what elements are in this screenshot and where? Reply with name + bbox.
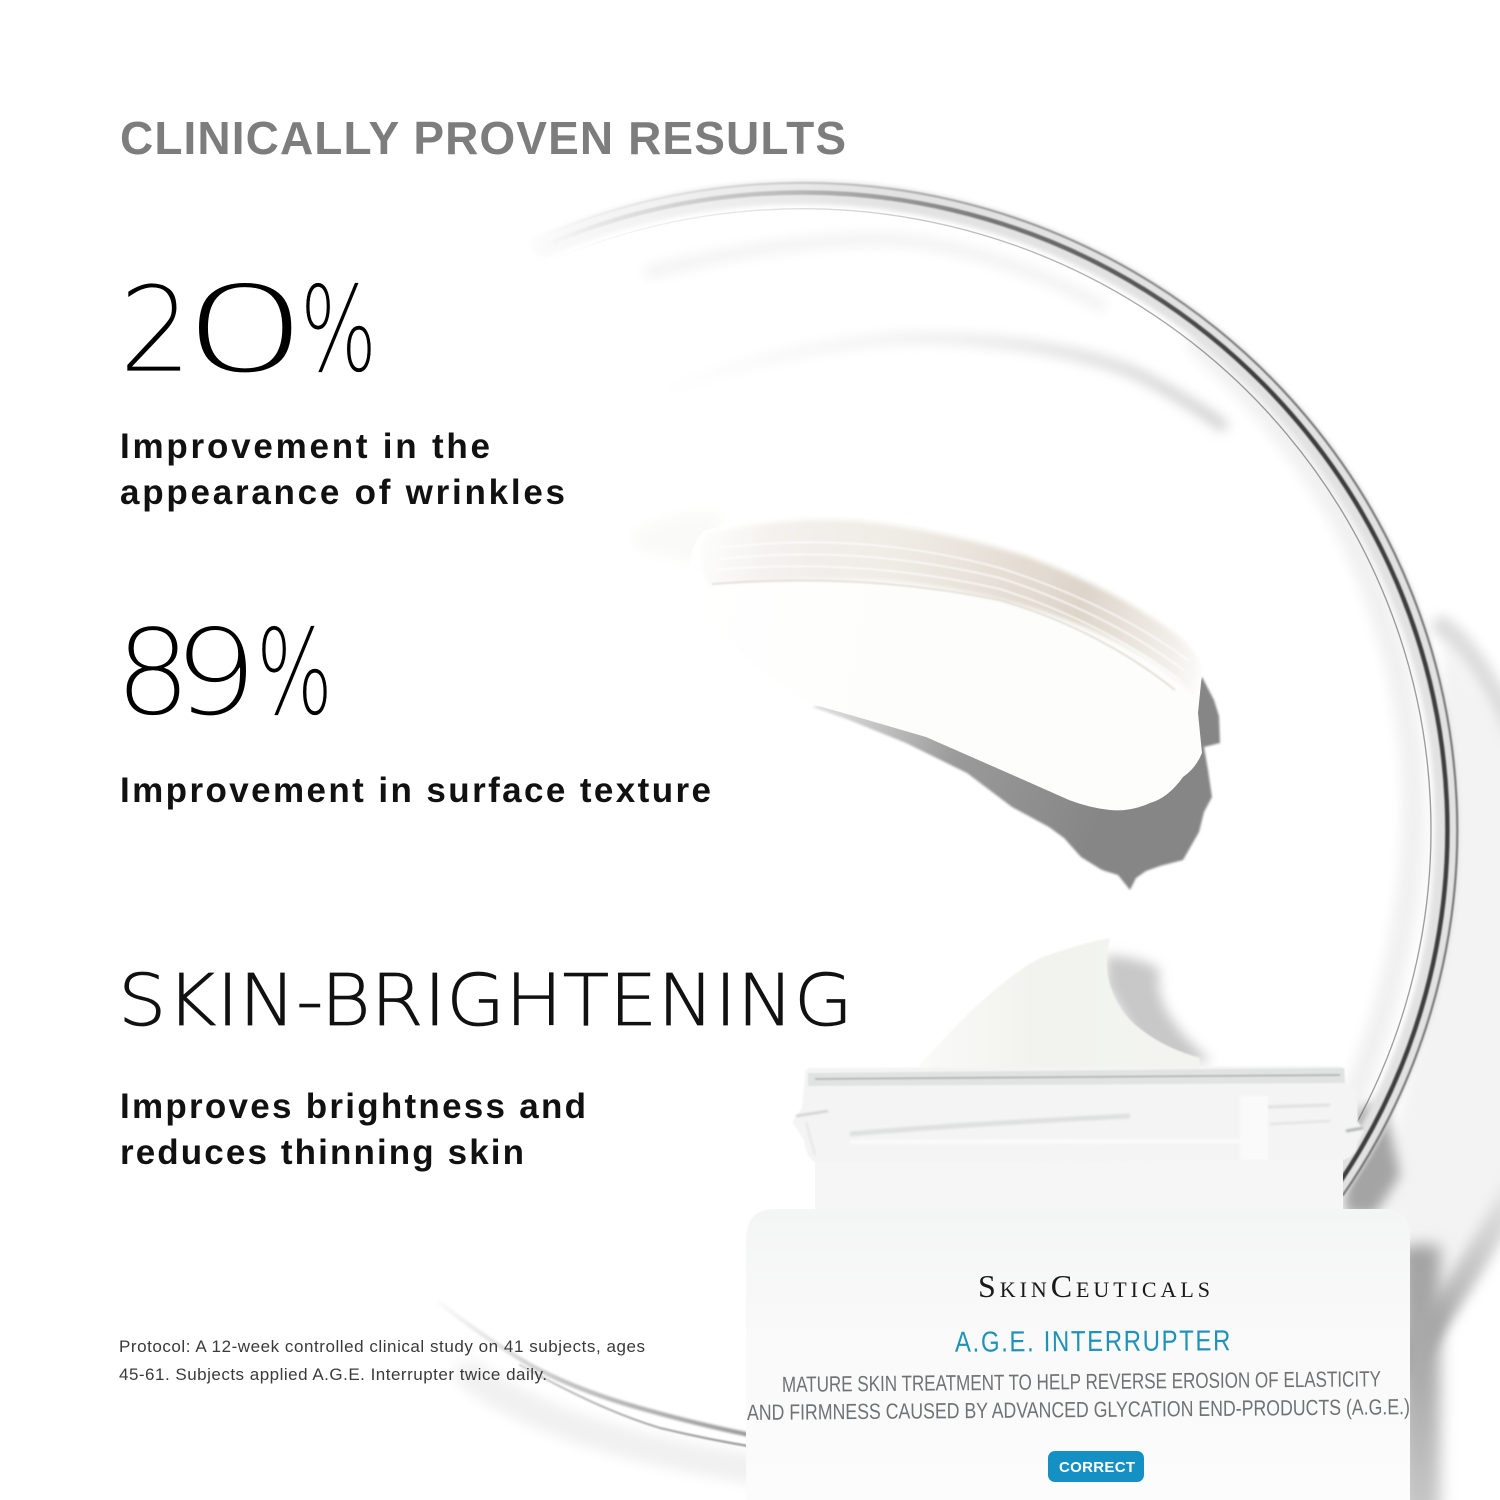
- inner soft swirl: [650, 338, 1222, 425]
- stat: skin-brightening: [118, 959, 853, 1172]
- rim highlight line: [815, 1075, 1340, 1079]
- wrinkles caption: Improvement in the: [120, 427, 490, 466]
- dish outer shadow upper: [1442, 626, 1500, 735]
- collar highlight: [1240, 1096, 1268, 1160]
- glass dish ring and swirl: [440, 183, 1500, 1500]
- protocol footnote: [119, 1337, 645, 1384]
- dish rim main dark line: [544, 193, 1447, 1189]
- cream shadow: [812, 677, 1220, 890]
- brightening caption: reduces thinning skin: [120, 1133, 524, 1172]
- cream swatch: [630, 512, 1220, 890]
- protocol footnote: 45-61. Subjects applied A.G.E. Interrupter twice daily.: [119, 1365, 547, 1384]
- number 89%: 9: [173, 605, 258, 743]
- jar collar details: [796, 1105, 1363, 1155]
- faint upper swirl: [650, 239, 1100, 305]
- brightening caption: Improves brightness and: [120, 1087, 586, 1126]
- title: CLINICALLY PROVEN RESULTS: [120, 112, 846, 164]
- texture caption: Improvement in surface texture: [120, 771, 711, 810]
- jar neck: [815, 1150, 1343, 1245]
- product name: A.G.E. INTERRUPTER: [955, 1325, 1232, 1359]
- number 89%: 8: [115, 605, 191, 743]
- stat: 89%: [115, 605, 711, 810]
- brightening caption: [120, 1087, 586, 1172]
- brand name: SkinCeuticals: [978, 1268, 1210, 1304]
- cream peak: [919, 938, 1200, 1072]
- cream body: [690, 516, 1202, 810]
- number 89%: [115, 605, 333, 743]
- protocol footnote: Protocol: A 12-week controlled clinical study on 41 subjects, ages: [119, 1337, 645, 1356]
- jar rim: [808, 1068, 1345, 1086]
- cream ridged band: [700, 520, 1199, 698]
- number 89%: %: [256, 605, 333, 743]
- dish bottom haze: [470, 1375, 760, 1470]
- cream faint tail: [630, 512, 720, 570]
- dish rim halo: [544, 193, 1447, 1189]
- number 20%: [119, 262, 377, 400]
- number 20%: 0: [180, 262, 311, 400]
- correct badge: [1048, 1451, 1144, 1482]
- cream peak shadow: [1106, 955, 1212, 1064]
- number 20%: 2: [119, 262, 192, 400]
- jar neck shadow: [1340, 1105, 1400, 1215]
- dish outer shadow lower: [1405, 1180, 1500, 1365]
- wrinkles caption: appearance of wrinkles: [120, 473, 565, 512]
- skin-brightening heading: SKIN-BRIGHTENING: [118, 959, 853, 1042]
- jar body: [746, 1209, 1410, 1500]
- dish rim inner line: [550, 209, 1431, 1180]
- dish outer light shade: [1375, 640, 1500, 1330]
- cream ridges: [712, 542, 1188, 690]
- dish inner haze: [1200, 345, 1414, 1130]
- jar: [746, 938, 1410, 1500]
- dish bottom arc second: [520, 1365, 760, 1448]
- dish rim outer line: [540, 183, 1457, 1195]
- number 20%: %: [300, 262, 377, 400]
- wrinkles caption: [120, 427, 565, 512]
- jar collar: [792, 1066, 1364, 1162]
- jar cast shadow: [1400, 1245, 1440, 1500]
- correct badge: CORRECT: [1059, 1459, 1135, 1476]
- stat: 20%: [119, 262, 565, 512]
- dish bottom arc main: [440, 1303, 760, 1437]
